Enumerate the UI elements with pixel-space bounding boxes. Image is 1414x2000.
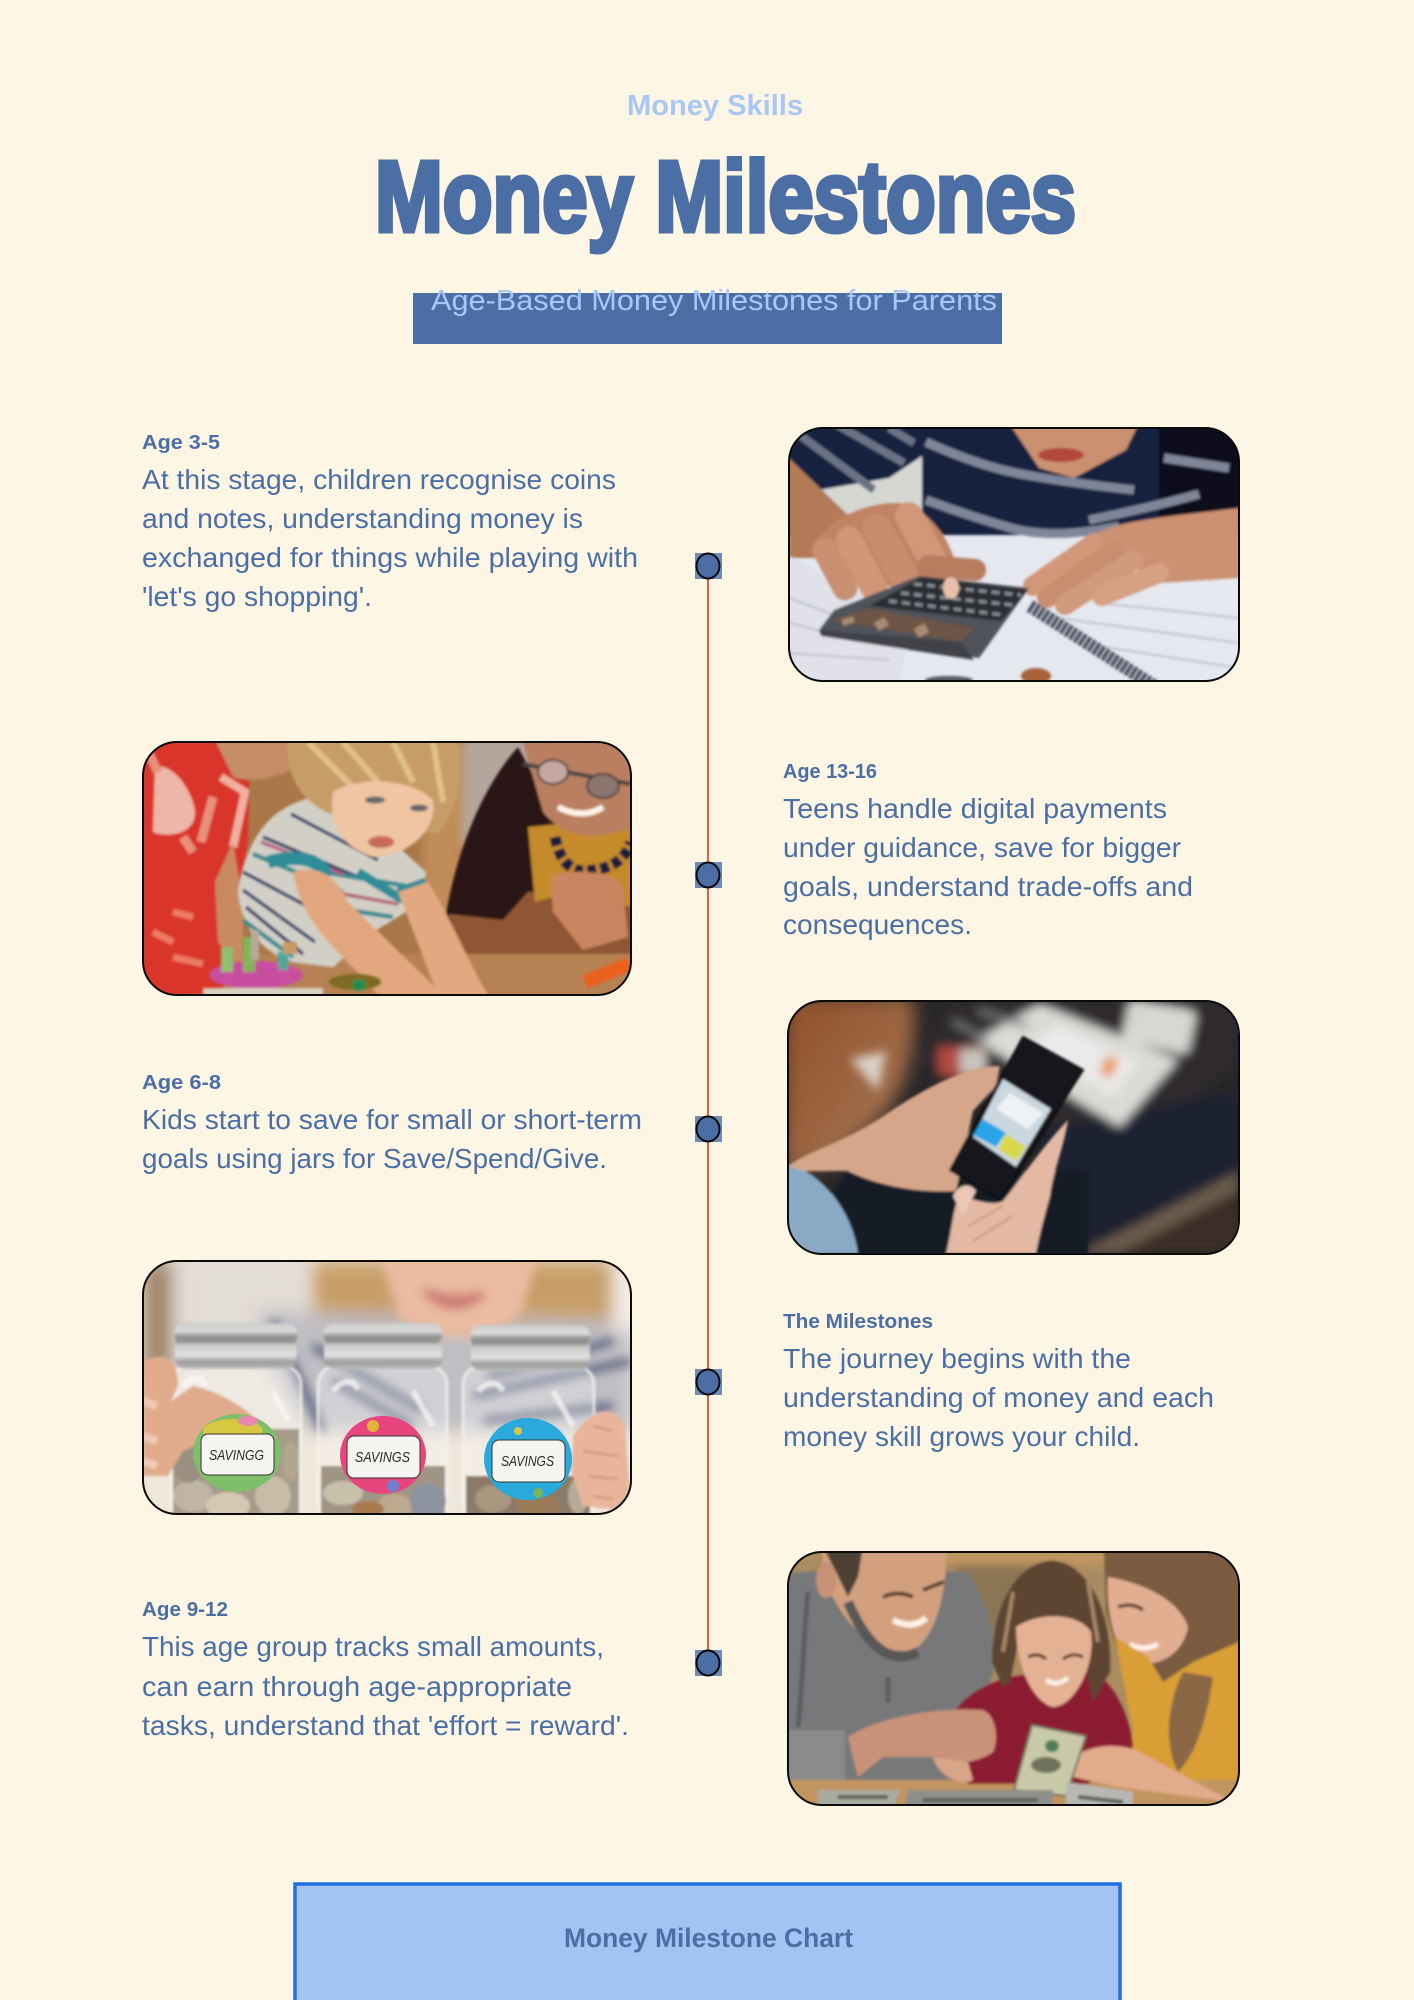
jar reflections xyxy=(183,1378,573,1426)
title: Money Milestones xyxy=(375,141,1076,253)
jar label: yellow-green: SAVINGG xyxy=(209,1447,264,1464)
timeline dot 2 xyxy=(695,862,722,888)
coins xyxy=(172,1429,590,1520)
timeline xyxy=(695,553,722,1676)
photo: three savings jars xyxy=(143,1256,633,1521)
text block: The Milestones: understanding of money and each xyxy=(783,1382,1214,1413)
text block: Age 6-8 xyxy=(142,1072,642,1174)
text block: Age 3-5: and notes, understanding money is xyxy=(142,503,583,534)
text block: The Milestones: money skill grows your child. xyxy=(783,1421,1140,1452)
jar label: yellow-green xyxy=(193,1414,281,1492)
footer panel: Money Milestone Chart xyxy=(295,1884,1120,2000)
timeline dot 4 xyxy=(695,1369,722,1395)
subtitle band xyxy=(413,285,1002,344)
text block: The Milestones: The journey begins with the xyxy=(783,1343,1131,1374)
text block: Age 13-16: consequences. xyxy=(783,909,972,940)
jar lids xyxy=(175,1323,297,1369)
timeline dot 3 xyxy=(695,1116,722,1142)
jar label: blue xyxy=(484,1418,572,1500)
timeline dot 1 xyxy=(695,553,722,579)
subtitle band: Age-Based Money Milestones for Parents xyxy=(431,285,997,317)
jar label: pink xyxy=(340,1416,426,1494)
eyebrow: Money Skills: Money Skills xyxy=(627,90,803,122)
photo: phone with payment app xyxy=(783,996,1239,1254)
text block: Age 9-12: can earn through age-appropriate xyxy=(142,1671,572,1702)
timeline dot 5 xyxy=(695,1650,722,1676)
text block: Age 3-5: exchanged for things while playing with xyxy=(142,542,638,573)
jar label: blue: SAVINGS xyxy=(501,1453,554,1470)
hands xyxy=(143,1357,258,1476)
text block: Age 6-8: goals using jars for Save/Spend/Give. xyxy=(142,1143,607,1174)
text block: The Milestones xyxy=(783,1311,1214,1452)
text block: Age 13-16: Age 13-16 xyxy=(783,761,877,783)
text block: Age 3-5: 'let's go shopping'. xyxy=(142,581,372,612)
text block: Age 3-5: Age 3-5 xyxy=(142,432,220,454)
text block: The Milestones: The Milestones xyxy=(783,1311,933,1333)
jar bodies xyxy=(171,1366,594,1521)
text block: Age 9-12 xyxy=(142,1599,629,1741)
photo: family counting dollars xyxy=(783,1547,1239,1810)
text block: Age 9-12: tasks, understand that 'effort = reward'. xyxy=(142,1710,629,1741)
photo: toddler playing with toys xyxy=(138,737,631,1004)
text block: Age 13-16: goals, understand trade-offs and xyxy=(783,871,1193,902)
footer panel: Money Milestone Chart: Money Milestone Chart xyxy=(564,1923,853,1953)
text block: Age 13-16: Teens handle digital payments xyxy=(783,793,1167,824)
text block: Age 3-5: At this stage, children recognise coins xyxy=(142,464,616,495)
text block: Age 9-12: Age 9-12 xyxy=(142,1599,228,1621)
text block: Age 3-5 xyxy=(142,432,638,612)
text block: Age 13-16: under guidance, save for bigger xyxy=(783,832,1181,863)
photo: child using calculator xyxy=(784,423,1244,686)
text block: Age 9-12: This age group tracks small amounts, xyxy=(142,1631,604,1662)
text block: Age 13-16 xyxy=(783,761,1193,940)
text block: Age 6-8: Kids start to save for small or short-term xyxy=(142,1104,642,1135)
jar label: pink: SAVINGS xyxy=(355,1449,410,1466)
text block: Age 6-8: Age 6-8 xyxy=(142,1072,221,1094)
